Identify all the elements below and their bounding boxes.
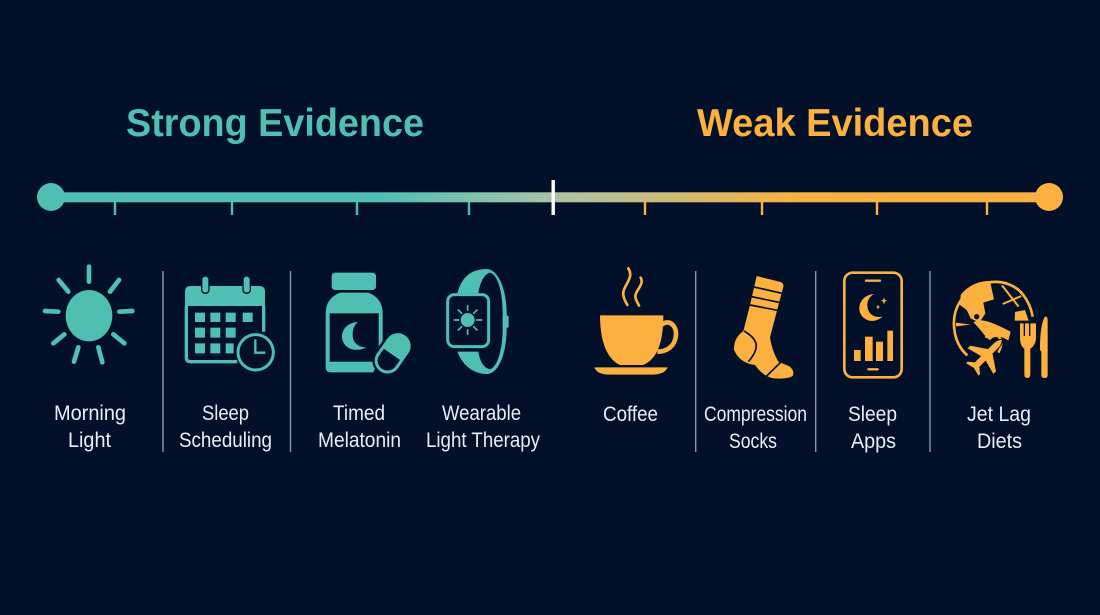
dividers [163, 271, 930, 452]
labels: strong evidence items: Sleep [202, 402, 249, 425]
labels: weak evidence items: Socks [729, 430, 777, 453]
labels: strong evidence items: Scheduling [179, 429, 272, 452]
labels: weak evidence items: Jet Lag [967, 403, 1031, 426]
labels: strong evidence items [54, 402, 540, 452]
heading: weak evidence: Weak Evidence [697, 102, 973, 145]
icon: wearable light watch [448, 269, 509, 374]
evidence timeline [37, 180, 1063, 215]
labels: strong evidence items: Wearable [442, 402, 521, 425]
labels: weak evidence items: Coffee [603, 403, 658, 426]
labels: weak evidence items: Diets [977, 430, 1022, 453]
labels: strong evidence items: Timed [333, 402, 385, 425]
labels: strong evidence items: Light Therapy [426, 429, 540, 452]
heading: strong evidence: Strong Evidence [126, 102, 424, 145]
icon: coffee cup [594, 268, 676, 375]
labels: weak evidence items [603, 403, 1031, 453]
labels: strong evidence items: Melatonin [318, 429, 401, 452]
icon: compression sock [734, 276, 793, 379]
icon: sleep app phone [844, 273, 902, 377]
labels: strong evidence items: Light [68, 429, 111, 452]
icon: globe, plane, fork and knife [954, 281, 1048, 383]
icon: sun [45, 267, 132, 362]
labels: weak evidence items: Compression [704, 403, 807, 426]
labels: weak evidence items: Apps [851, 430, 896, 453]
labels: weak evidence items: Sleep [848, 403, 897, 426]
labels: strong evidence items: Morning [54, 402, 126, 425]
icon: calendar with clock [185, 276, 273, 370]
icon: melatonin bottle and pill [326, 273, 419, 382]
